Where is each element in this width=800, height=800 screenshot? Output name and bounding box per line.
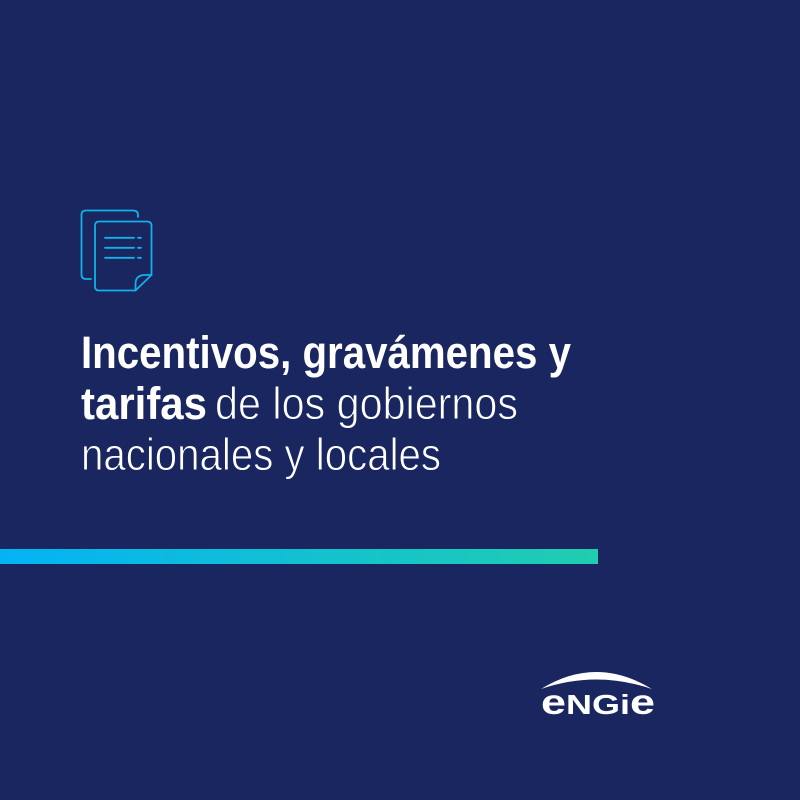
logo: ENGIE — [541, 672, 655, 722]
logo wordmark: eNGi e — [541, 683, 655, 722]
logo arc — [541, 672, 652, 689]
gradient bar — [0, 549, 598, 564]
title line 3 light: nacionales y locales — [81, 429, 441, 480]
title line 1: Incentivos, gravámenes y — [81, 327, 571, 378]
title line 2 bold: tarifas — [81, 378, 207, 429]
icon: documents — [82, 210, 152, 290]
title — [81, 327, 571, 480]
title line 2 light: de los gobiernos — [215, 378, 518, 429]
